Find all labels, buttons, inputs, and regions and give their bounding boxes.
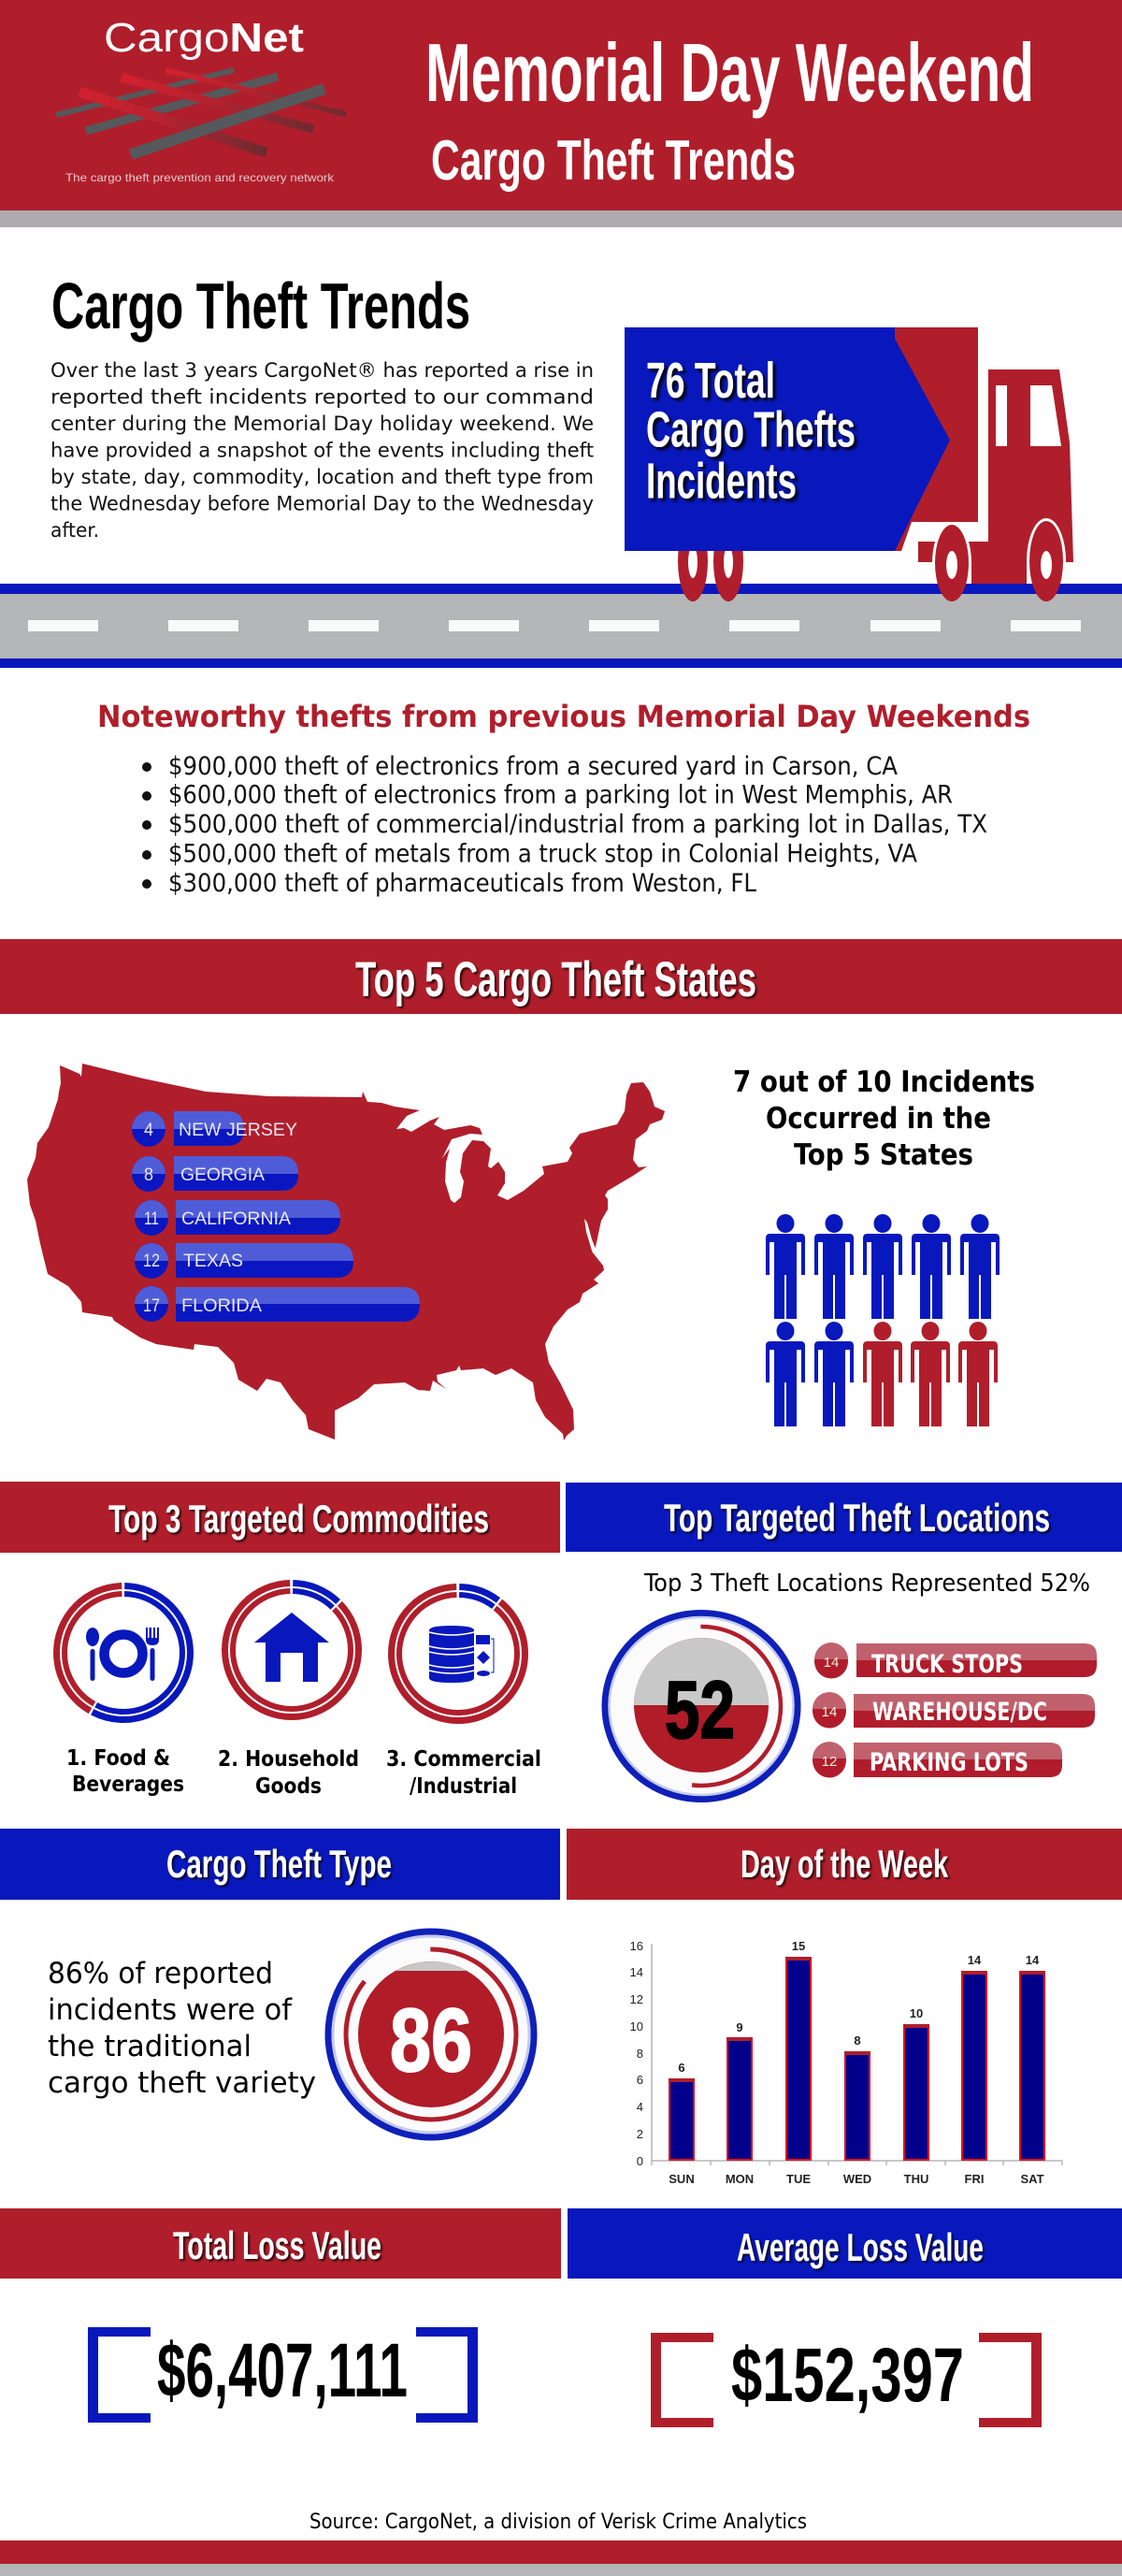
CargoNet logo: Cargo Net — [104, 15, 304, 61]
header banner — [0, 0, 1122, 227]
noteworthy thefts list: $300,000 theft of pharmaceuticals from Weston, FL — [168, 869, 756, 898]
footer band — [0, 2540, 1122, 2576]
7 out of 10 statement: 7 out of 10 Incidents — [733, 1065, 1035, 1099]
bar: Florida — [135, 1286, 420, 1322]
theft type statement: cargo theft variety — [48, 2066, 316, 2100]
commodity labels: Beverages — [72, 1773, 184, 1797]
section bar: commodities: Top 3 Targeted Commodities — [108, 1497, 489, 1541]
data labels: 8 — [854, 2033, 861, 2048]
donut: commercial industrial — [391, 1586, 525, 1721]
y axis labels: 14 — [630, 1965, 643, 1979]
x axis labels: MON — [726, 2172, 754, 2186]
y axis labels: 16 — [630, 1939, 643, 1953]
map of the USA — [27, 1064, 665, 1440]
gauge: 86 percent: 86 — [390, 1990, 472, 2091]
intro paragraph — [50, 359, 594, 542]
y axis labels: 6 — [637, 2073, 643, 2087]
data labels: 14 — [968, 1953, 982, 1967]
pictogram: 7 of 10 people — [766, 1214, 1000, 1426]
bar: Texas — [135, 1243, 353, 1279]
data labels: 6 — [678, 2061, 685, 2075]
section bar: total loss: Total Loss Value — [173, 2223, 381, 2267]
commodity labels — [66, 1746, 541, 1799]
truck callout: Cargo Thefts — [646, 402, 856, 458]
section bar: average loss — [568, 2208, 1122, 2279]
x axis labels: SUN — [669, 2172, 695, 2186]
y axis labels: 8 — [637, 2047, 643, 2061]
data labels — [678, 1939, 1040, 2075]
commodity labels: Goods — [255, 1774, 322, 1799]
intro paragraph: have provided a snapshot of the events including theft — [50, 440, 594, 462]
intro paragraph: by state, day, commodity, location and theft type from — [50, 466, 594, 488]
CargoNet logo — [56, 15, 346, 184]
US map with state bars — [27, 1064, 665, 1440]
gauge: 86 percent — [328, 1932, 534, 2137]
heading: cargo theft trends: Cargo Theft Trends — [51, 269, 470, 342]
donut: food and beverages — [56, 1586, 191, 1719]
section bar: theft type — [0, 1829, 560, 1900]
truck callout: 76 Total — [646, 353, 775, 409]
x axis labels — [669, 2172, 1044, 2186]
y axis labels — [630, 1939, 643, 2168]
x axis labels: FRI — [965, 2172, 984, 2186]
y axis labels: 12 — [630, 1992, 643, 2006]
location bar: truck stops: 14 — [824, 1655, 839, 1671]
CargoNet logo: The cargo theft prevention and recovery network — [65, 171, 335, 184]
total loss value: $6,407,111 — [157, 2328, 408, 2413]
bar: Georgia — [132, 1156, 298, 1192]
section bar: commodities — [0, 1482, 560, 1553]
noteworthy thefts list: $900,000 theft of electronics from a secured yard in Carson, CA — [168, 752, 898, 781]
icon: house — [254, 1613, 329, 1682]
theft type statement — [48, 1957, 316, 2100]
location bar: warehouse: 14 — [822, 1704, 837, 1720]
section bar: day of week — [567, 1829, 1122, 1900]
bar: New Jersey — [132, 1111, 297, 1147]
location bar: truck stops: TRUCK STOPS — [871, 1650, 1023, 1679]
location bar: parking lots: PARKING LOTS — [870, 1748, 1028, 1777]
noteworthy thefts list: $500,000 theft of commercial/industrial from a parking lot in Dallas, TX — [168, 810, 987, 839]
bar: Florida: FLORIDA — [181, 1296, 262, 1316]
chart axes — [652, 1944, 1062, 2165]
section bar: theft type: Cargo Theft Type — [166, 1842, 392, 1886]
y axis labels: 10 — [630, 2019, 643, 2033]
x axis labels: TUE — [786, 2172, 811, 2186]
bar: Georgia: GEORGIA — [180, 1165, 265, 1185]
icon: database and flowchart — [429, 1626, 494, 1683]
bar: California — [135, 1200, 340, 1236]
intro paragraph: Over the last 3 years CargoNet® has reported a rise in — [50, 359, 594, 382]
theft type statement: incidents were of — [48, 1993, 293, 2027]
front wheels — [932, 518, 1066, 601]
icon: plate and cutlery — [86, 1628, 159, 1681]
section bar: day of week: Day of the Week — [741, 1842, 948, 1886]
x axis labels: SAT — [1020, 2172, 1044, 2186]
section bar: top 5 states — [0, 939, 1122, 1014]
bar: Florida: 17 — [143, 1296, 160, 1316]
bars — [669, 1959, 1044, 2160]
intro paragraph: after. — [50, 519, 99, 542]
bar: California: CALIFORNIA — [181, 1209, 291, 1229]
bar chart: day of week — [630, 1939, 1062, 2186]
gauge: 52 percent — [605, 1613, 798, 1800]
total loss value — [88, 2327, 478, 2423]
location bar: parking lots — [813, 1742, 1062, 1777]
noteworthy thefts list: $500,000 theft of metals from a truck stop in Colonial Heights, VA — [168, 840, 917, 868]
section bar: locations — [566, 1483, 1122, 1552]
7 out of 10 statement: Top 5 States — [794, 1138, 973, 1172]
y axis labels: 0 — [637, 2154, 643, 2168]
x axis labels: WED — [843, 2172, 871, 2186]
theft type statement: 86% of reported — [48, 1957, 273, 1990]
7 out of 10 statement — [733, 1065, 1035, 1172]
commodity labels: 1. Food & — [66, 1746, 170, 1771]
location bar: warehouse — [813, 1692, 1095, 1729]
y axis labels: 4 — [637, 2100, 643, 2114]
locations statement: Top 3 Theft Locations Represented 52% — [643, 1570, 1090, 1598]
noteworthy heading: Noteworthy thefts from previous Memorial Day Weekends — [97, 699, 1030, 734]
section bar: total loss — [0, 2208, 561, 2279]
truck illustration — [625, 327, 1073, 601]
truck callout: Incidents — [646, 453, 797, 509]
location bar: warehouse: WAREHOUSE/DC — [872, 1698, 1047, 1727]
7 out of 10 statement: Occurred in the — [766, 1102, 991, 1136]
data labels: 14 — [1026, 1953, 1040, 1967]
data labels: 9 — [736, 2020, 743, 2034]
y axis labels: 2 — [637, 2127, 643, 2141]
road — [0, 584, 1122, 668]
bar: Texas: 12 — [143, 1252, 160, 1271]
section bar: top 5 states: Top 5 Cargo Theft States — [355, 952, 756, 1007]
subtitle: Cargo Theft Trends — [431, 129, 796, 192]
location bar: parking lots: 12 — [822, 1754, 837, 1770]
theft type statement: the traditional — [48, 2030, 252, 2063]
average loss value: $152,397 — [731, 2333, 964, 2418]
rear wheels — [678, 521, 743, 601]
gauge: 52 percent: 52 — [665, 1665, 735, 1756]
commodity labels: 3. Commercial — [386, 1747, 541, 1772]
donut: household goods — [224, 1583, 359, 1717]
commodity labels: /Industrial — [410, 1774, 517, 1799]
bar: New Jersey: NEW JERSEY — [179, 1121, 297, 1140]
x axis labels: THU — [904, 2172, 928, 2186]
bar: California: 11 — [144, 1209, 159, 1229]
section bar: average loss: Average Loss Value — [737, 2225, 984, 2269]
bar: New Jersey: 4 — [144, 1121, 153, 1140]
noteworthy thefts list — [142, 752, 987, 898]
noteworthy thefts list: $600,000 theft of electronics from a parking lot in West Memphis, AR — [168, 780, 953, 810]
location bar: truck stops — [814, 1643, 1097, 1679]
intro paragraph: the Wednesday before Memorial Day to the Wednesday — [50, 492, 594, 514]
bar: Georgia: 8 — [144, 1165, 153, 1185]
intro paragraph: center during the Memorial Day holiday weekend. We — [50, 412, 594, 435]
data labels: 10 — [910, 2006, 923, 2020]
source note: Source: CargoNet, a division of Verisk Crime Analytics — [309, 2511, 807, 2534]
truck cab — [918, 369, 1073, 584]
intro paragraph: reported theft incidents reported to our command — [50, 385, 594, 408]
commodity labels: 2. Household — [218, 1747, 359, 1772]
data labels: 15 — [792, 1939, 805, 1953]
bar: Texas: TEXAS — [183, 1252, 243, 1271]
truck callout — [646, 353, 856, 509]
